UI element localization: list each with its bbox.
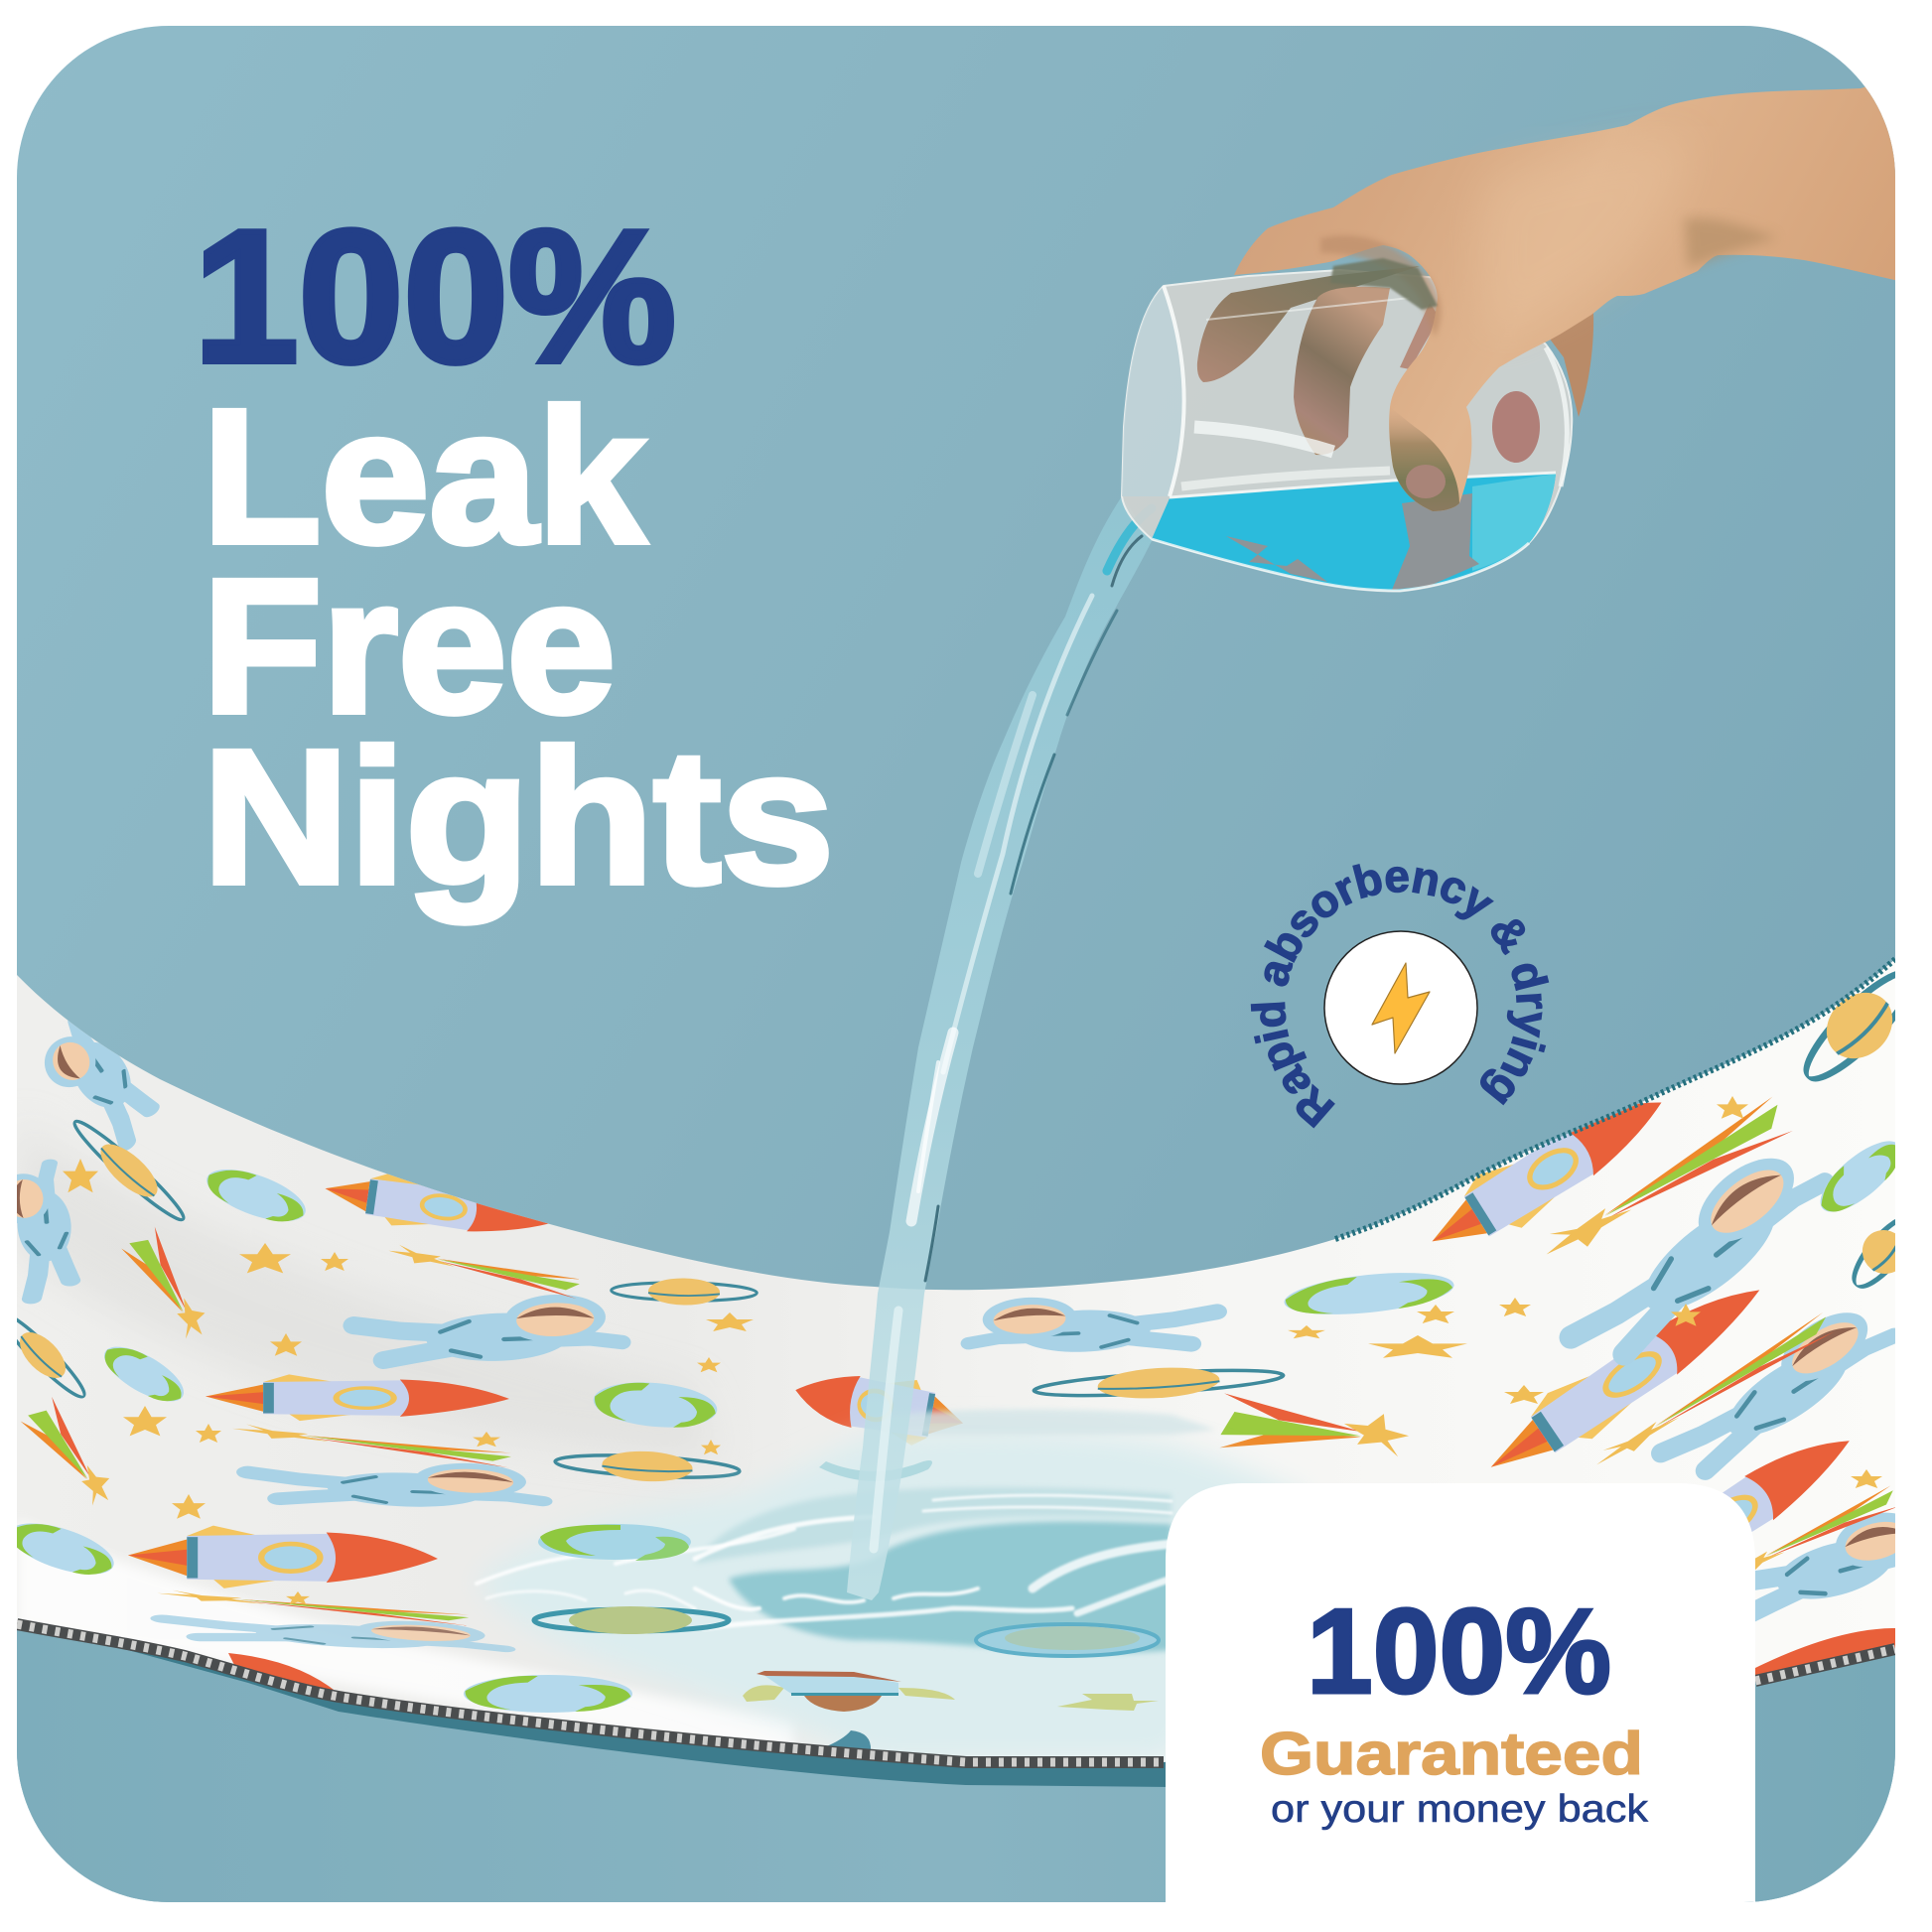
stream highlights <box>874 508 1152 1549</box>
glass body <box>1122 270 1572 591</box>
mat fold shading <box>17 1122 794 1762</box>
headline figure: 100% <box>194 192 676 402</box>
headline line: Nights: Nights <box>203 710 834 923</box>
faded rocket <box>743 1671 955 1712</box>
thumb nail <box>1406 465 1446 498</box>
ring around stream <box>819 1460 932 1481</box>
thumb shading <box>1389 407 1459 511</box>
water pool on mat <box>464 1410 1311 1762</box>
badge circle <box>1324 931 1477 1084</box>
card note: or your money back <box>1271 1788 1649 1831</box>
absorbent mat <box>0 953 1932 1762</box>
headline line: Free: Free <box>203 539 616 753</box>
white ripples <box>477 1495 1172 1628</box>
palm edge behind glass <box>1549 313 1593 417</box>
top stitched edge <box>1335 959 1895 1239</box>
lower planet <box>464 1675 632 1713</box>
liquid grey reflections <box>1226 493 1479 590</box>
hand highlight <box>1479 139 1688 338</box>
astronauts <box>0 1010 1932 1655</box>
submerged planet <box>538 1524 691 1561</box>
stream body <box>847 496 1152 1600</box>
fin at hem <box>828 1730 871 1749</box>
submerged ringed planet <box>534 1606 729 1634</box>
pale upper band <box>884 1410 1216 1435</box>
guarantee card <box>1166 1483 1755 1906</box>
submerged flat planet <box>976 1624 1159 1656</box>
wet film <box>477 1430 1311 1762</box>
planets <box>4 1130 1911 1585</box>
small stars <box>50 1096 1882 1655</box>
icon: lightning bolt <box>1372 963 1430 1053</box>
dark band above fingers <box>1330 258 1438 310</box>
glass highlights <box>1152 286 1567 591</box>
printed space pattern <box>0 953 1932 1693</box>
shooting stars <box>21 1096 1900 1625</box>
card figure: 100% <box>1307 1584 1611 1719</box>
upper ripple band <box>695 1487 1172 1564</box>
fingers seen through glass <box>1197 266 1540 463</box>
background lower band <box>17 1628 1895 1906</box>
badge: rapid absorbency <box>1251 864 1549 1128</box>
rim inner tint <box>1122 286 1184 496</box>
curved caption: Rapid absorbency & drying <box>1251 864 1549 1128</box>
wrist shading <box>1684 217 1777 268</box>
headline <box>194 192 834 923</box>
card word: Guaranteed <box>1260 1721 1643 1787</box>
knuckle shading <box>1320 235 1441 338</box>
card background <box>1166 1483 1755 1906</box>
deep water <box>729 1522 1172 1653</box>
blue liquid <box>1152 474 1556 591</box>
mat fabric <box>17 959 1895 1762</box>
bottom stitched hem <box>17 1624 1895 1762</box>
shadow under mat <box>130 1650 1166 1787</box>
lighter liquid <box>1472 474 1556 571</box>
pouring water stream <box>847 496 1152 1600</box>
hand and arm <box>1234 60 1916 511</box>
faded star <box>1057 1694 1159 1711</box>
headline line: Leak: Leak <box>203 369 645 583</box>
rockets <box>128 1072 1895 1693</box>
ringed planets <box>0 953 1932 1486</box>
hand holding the glass <box>1122 60 1916 591</box>
